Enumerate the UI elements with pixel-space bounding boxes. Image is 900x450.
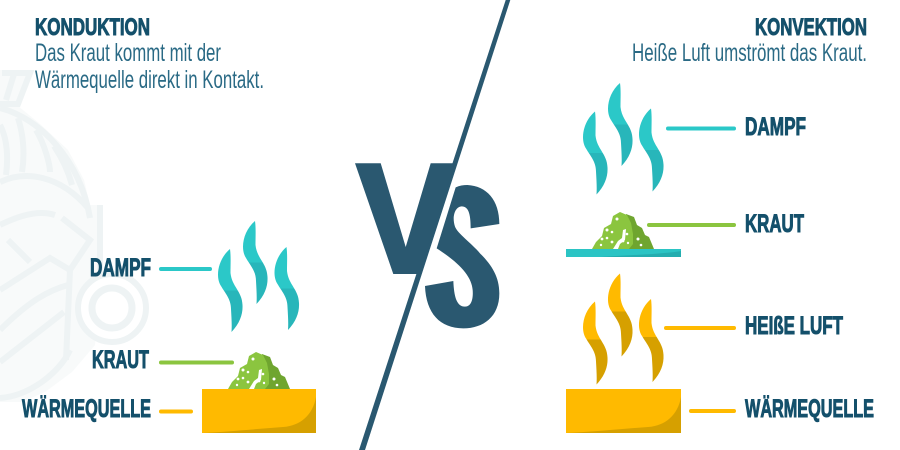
steam wisps right (583, 83, 664, 194)
heading: Konduktion (35, 14, 264, 94)
heading: Konduktion: Das Kraut kommt mit der (35, 39, 221, 67)
divider and VS mark (355, 0, 510, 450)
heading: Konvektion (632, 14, 867, 67)
left diagram: conduction (202, 221, 316, 433)
heat source right (566, 389, 681, 433)
heading: Konduktion: KONDUKTION (35, 14, 150, 41)
labels right (647, 113, 874, 423)
labels right: DAMPF (745, 113, 806, 141)
labels right: KRAUT (745, 210, 804, 238)
labels right: HEIßE LUFT (745, 312, 843, 340)
heading: Konduktion: Wärmequelle direkt in Kontakt. (35, 66, 264, 94)
labels left: KRAUT (92, 346, 149, 374)
teal plate (566, 249, 681, 257)
watermark: helmeted head logo (0, 70, 146, 402)
labels left: WÄRMEQUELLE (22, 395, 151, 423)
labels left (22, 254, 234, 423)
steam wisps left (218, 221, 299, 332)
heat source left (202, 389, 316, 433)
right diagram: convection (566, 83, 681, 433)
herb pile right (592, 212, 654, 249)
hot air wisps (583, 274, 664, 384)
labels left: DAMPF (90, 254, 151, 282)
herb pile left (228, 352, 290, 389)
